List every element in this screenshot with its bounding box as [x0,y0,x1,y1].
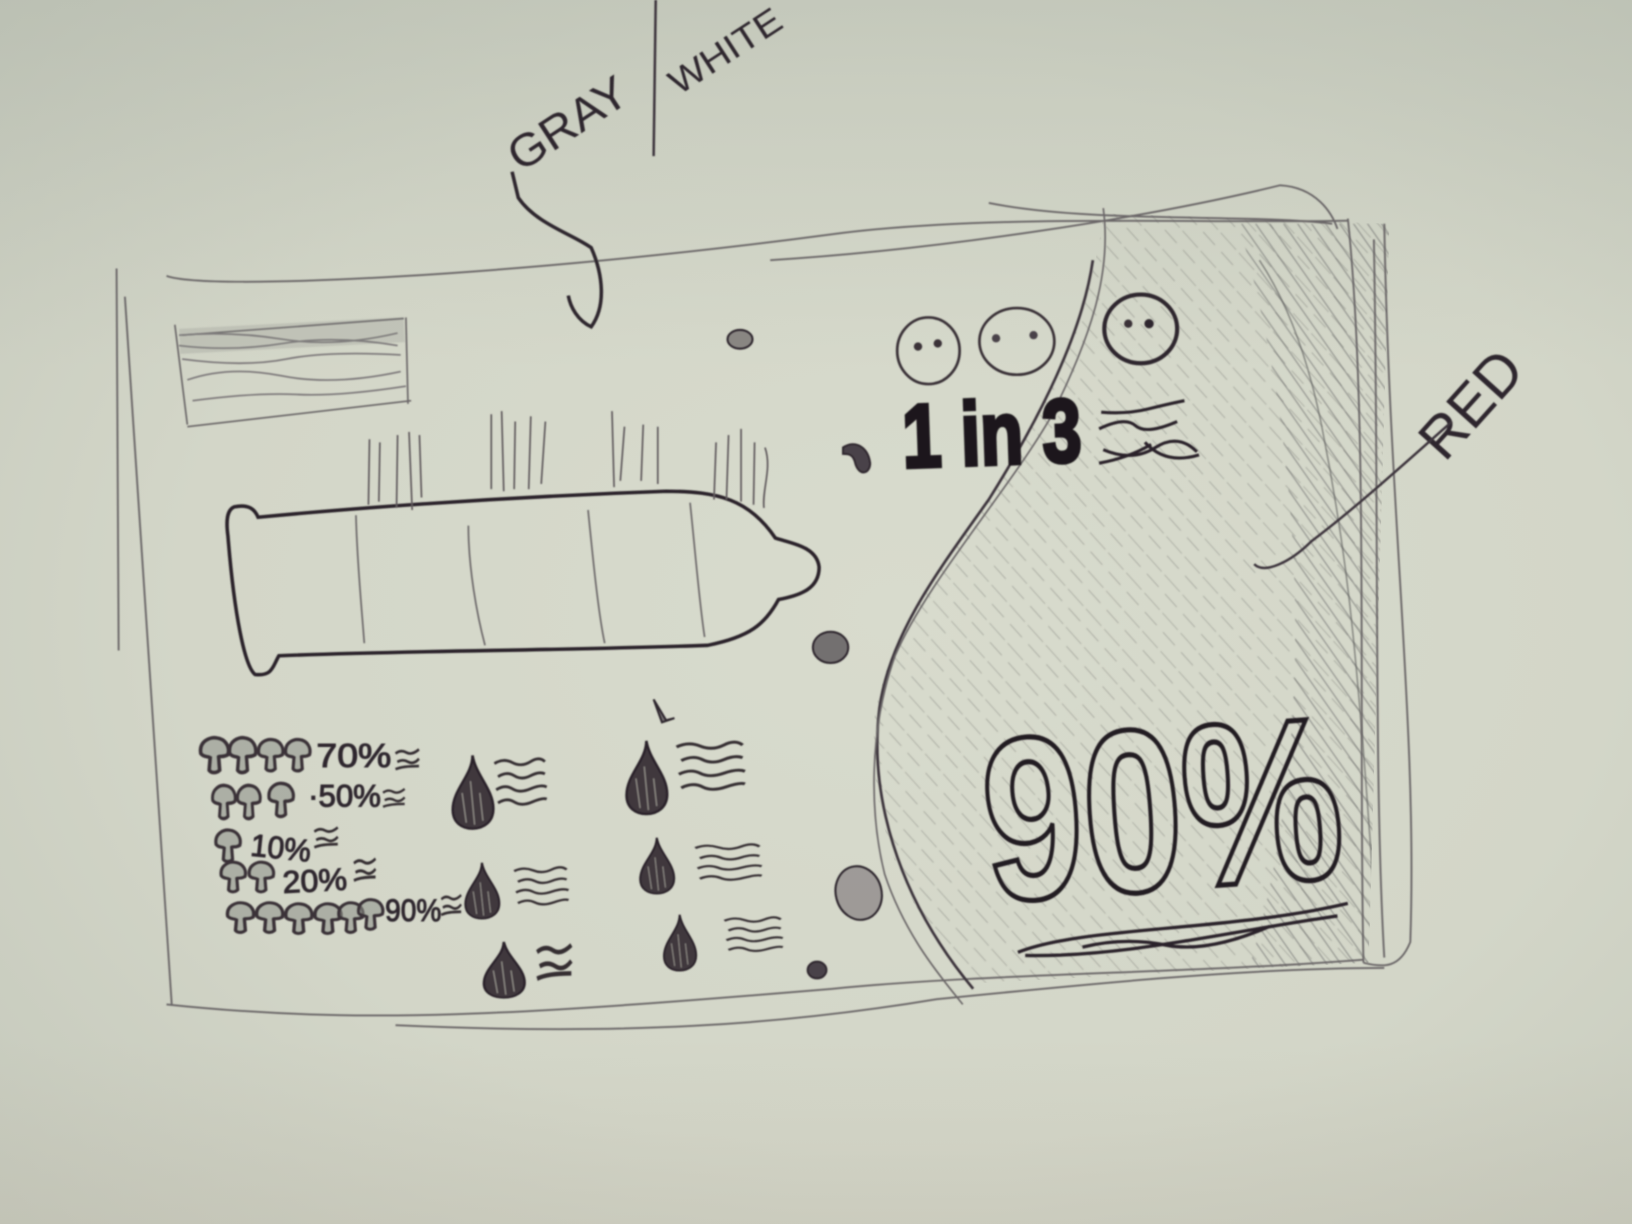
item: drop 1 [453,755,547,829]
row: 90% [228,893,461,933]
label: white: WHITE [662,1,789,102]
arrow: red region [1254,422,1452,568]
segment label lines 1 [368,432,422,510]
item: drop 6 [484,942,571,998]
arrow: gray region [512,172,601,327]
description lines [1099,401,1199,463]
row: 90%: 90% [385,893,441,928]
text: 1 in 3: 1 in 3 [901,380,1083,486]
panel divider curve [874,208,1105,1004]
icon: small round mark [813,632,848,663]
row: 10% [216,827,338,869]
row: 20%: 20% [282,862,348,900]
icon: hatched round mark [830,861,888,925]
description lines [1018,903,1348,956]
segment label lines 3 [612,411,658,487]
row: 70%: 70% [316,738,391,775]
drop items [453,741,783,998]
annotation: red [1254,337,1536,568]
statistic: 90% [974,668,1350,956]
row: 50%: ·50% [308,779,381,814]
condom segment lines [356,503,705,645]
outer sketch frame [117,185,1412,1029]
label: red: RED [1406,337,1536,472]
icon: small mark top [728,330,753,349]
row: 70% [201,738,419,775]
row: 50% [213,779,405,819]
face 3 [1104,295,1177,363]
face 2 [979,308,1054,375]
item: drop 4 [640,838,762,894]
icon: small mark middle [843,444,870,472]
text: 90%: 90% [974,668,1350,950]
annotation: gray and white [498,0,789,327]
item: drop 2 [627,741,745,814]
small icons [654,330,888,978]
intro text block [175,317,411,427]
divider: gray and white [654,0,656,156]
label: gray: GRAY [498,66,638,181]
icon: small mark bottom [808,962,826,978]
red panel hatching [874,214,1390,982]
mushroom statistics list [201,738,461,933]
segment label lines 2 [491,411,545,491]
icon: small mark lower [654,699,674,722]
face 1 [897,317,960,384]
item: drop 3 [465,863,568,919]
item: drop 5 [664,915,783,971]
condom outline [227,491,819,675]
row: 10%: 10% [249,828,313,869]
ink drawing [117,0,1536,1029]
condom chart [227,411,819,675]
segment label lines 4 [714,429,768,508]
row: 20% [221,859,376,900]
statistic: 1 in 3 [897,295,1199,486]
